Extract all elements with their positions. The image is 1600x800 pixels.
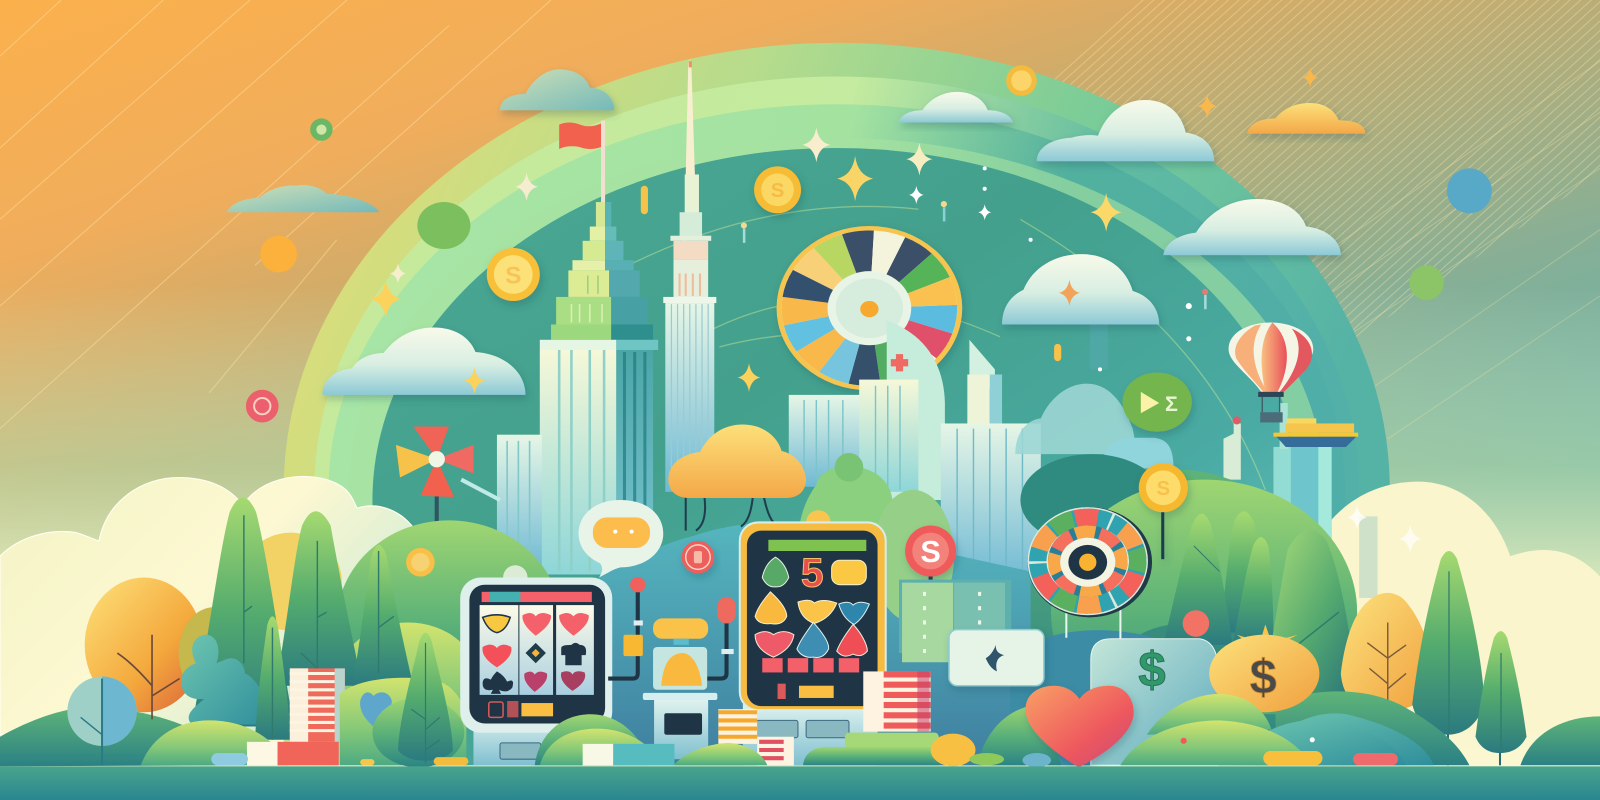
pebbles <box>969 751 1398 767</box>
diagonal light rays top right <box>1036 0 1600 439</box>
big green leaf tree <box>1258 530 1357 714</box>
teal bush <box>181 635 270 724</box>
gold coins <box>406 65 1188 577</box>
slot machine 2 <box>740 510 886 765</box>
back hills row <box>337 454 1367 745</box>
back mini hills behind trees <box>179 533 342 699</box>
slot machine 2: 5 <box>801 550 824 596</box>
green hills around machines <box>535 714 976 766</box>
mid blue hills <box>531 453 1194 765</box>
dollar card: $ <box>1138 644 1166 698</box>
sign tower with dots <box>899 580 1011 663</box>
casino chips stack centre <box>718 709 794 765</box>
casino chips stack right <box>863 671 931 732</box>
balloon <box>1229 322 1313 422</box>
tall tree right <box>1412 551 1485 765</box>
gold coins: S <box>505 263 521 290</box>
money bag: $ <box>1250 651 1277 705</box>
cloud: orange tree <box>668 424 806 531</box>
green badge with play symbol <box>1122 372 1192 432</box>
red coin near bubble <box>682 541 714 573</box>
slot machine levers and gumball <box>608 577 736 759</box>
slot machine 1 <box>460 565 612 765</box>
teal hill with round tree left of base <box>0 707 245 766</box>
decorative balls <box>260 118 1492 300</box>
cloud: dome shaped with stem <box>1002 254 1159 369</box>
cloud: top centre <box>500 69 614 110</box>
hill and heart left <box>141 633 466 767</box>
S sign: S <box>920 535 941 569</box>
money bag <box>1209 624 1319 712</box>
windmill <box>396 427 500 522</box>
foreground ground band <box>0 766 1600 800</box>
skyscraper: stepped tower with flag <box>497 120 658 574</box>
green badge with play symbol: Σ <box>1165 392 1178 416</box>
cloud: right mid <box>1163 199 1341 255</box>
blue lollipop tree <box>67 677 137 765</box>
back city buildings right <box>1223 403 1332 541</box>
forest small tree with pine <box>255 616 291 740</box>
sparkles <box>370 67 1422 553</box>
cloud: left of tower <box>322 328 526 395</box>
forest tree 1 <box>192 497 294 727</box>
gold coins: S <box>771 180 784 202</box>
blue cloud behind badge <box>1015 384 1173 468</box>
red coin left <box>246 390 279 422</box>
cloud: large upper right <box>1037 100 1214 161</box>
forest right cone trees <box>1163 511 1273 645</box>
skyscraper: spire tower <box>663 60 716 492</box>
forest tree 2 <box>276 511 362 694</box>
cream and red blocks left <box>211 742 468 765</box>
speech bubble <box>579 500 663 578</box>
cream background clouds left <box>0 477 418 735</box>
cloud: dome top <box>898 92 1013 122</box>
orange round tree left <box>85 578 203 719</box>
big rainbow dome <box>284 43 1390 765</box>
roulette wheel <box>1028 507 1152 653</box>
diagonal light rays top left <box>0 0 551 429</box>
foreground green hills right <box>978 694 1434 765</box>
small tree right <box>1476 631 1527 765</box>
gold coins: S <box>1156 478 1170 500</box>
dollar card <box>1091 639 1218 765</box>
wheel of fortune <box>777 226 962 390</box>
cream background clouds right <box>1276 482 1600 735</box>
forest tree 3 <box>352 545 413 686</box>
boat <box>1273 418 1358 447</box>
S sign <box>905 526 956 584</box>
cloud: left teal <box>227 185 380 212</box>
building with red cross <box>789 320 945 500</box>
big heart <box>1026 686 1134 767</box>
orange right tree <box>1341 593 1433 710</box>
cloud: yellow <box>1247 103 1365 134</box>
right foreground hill slopes <box>1276 691 1600 765</box>
chips stack left <box>290 668 345 742</box>
card with arrow icon <box>949 630 1044 686</box>
building: right tall <box>941 340 1041 582</box>
